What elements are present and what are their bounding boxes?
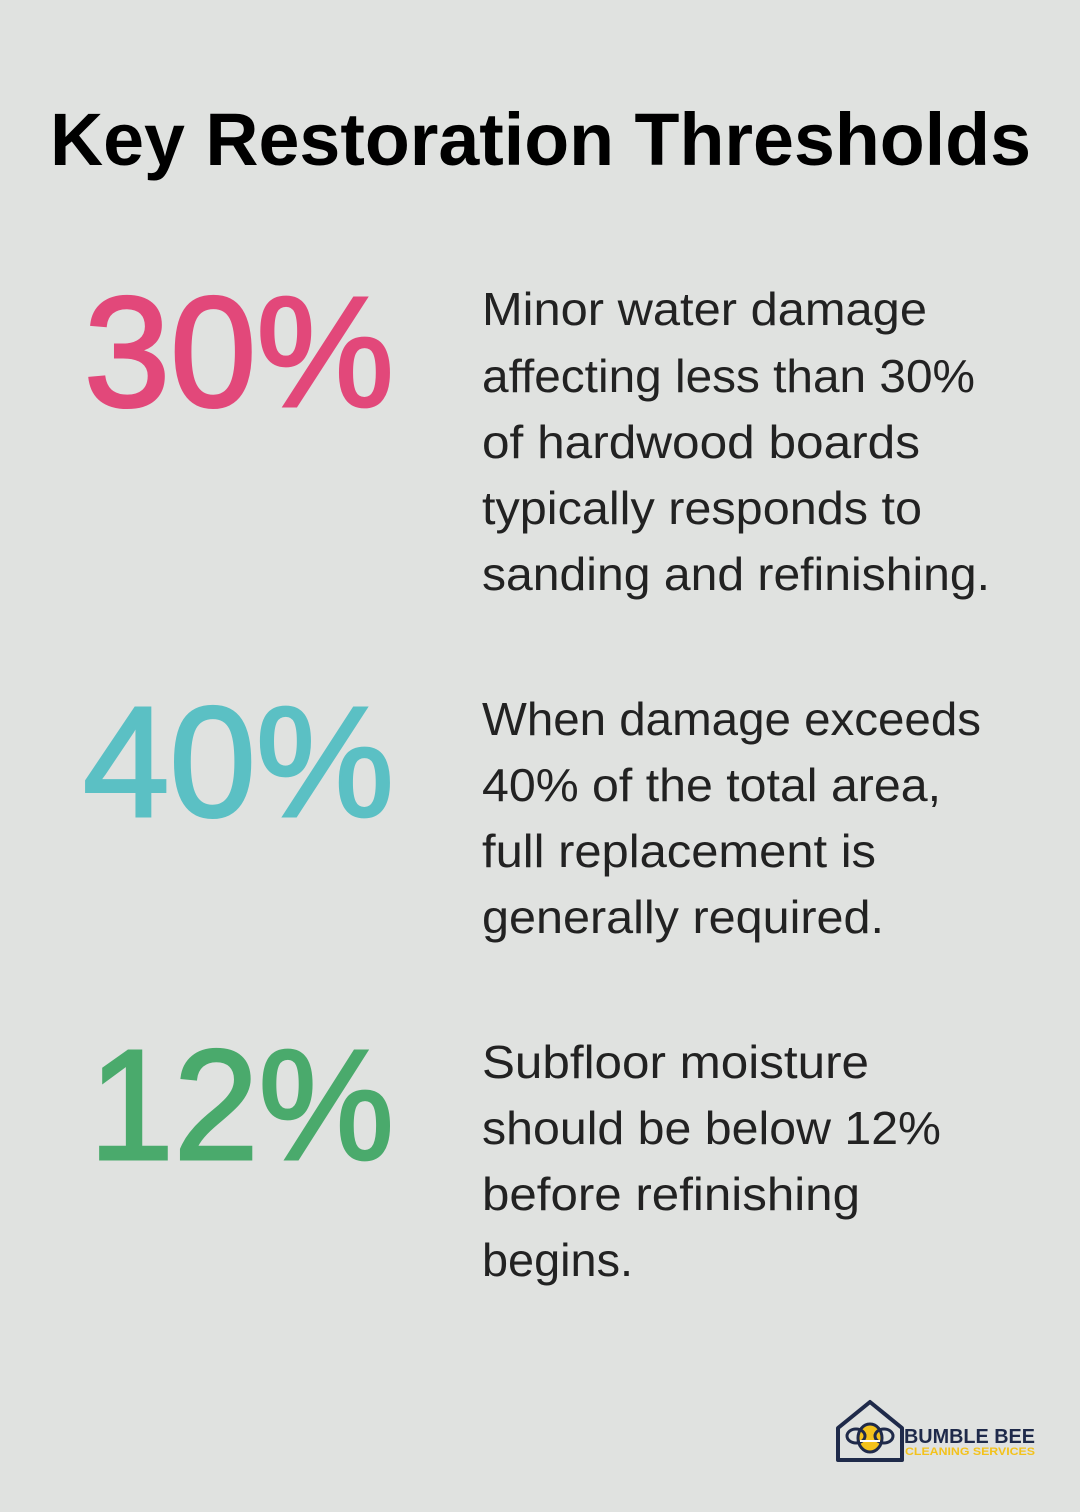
text block 3: before refinishing: [482, 1168, 860, 1220]
stat: 30%: [84, 265, 990, 600]
stat: 40%: [83, 675, 981, 943]
stat: 12%: [89, 1018, 941, 1286]
text block 3: [482, 1036, 941, 1286]
text block 3: Subfloor moisture: [482, 1036, 869, 1088]
text block 2: 40% of the total area,: [482, 759, 941, 811]
text block 1: typically responds to: [482, 482, 922, 534]
logo: [838, 1402, 1035, 1460]
logo: CLEANING SERVICES: [905, 1446, 1035, 1458]
text block 1: sanding and refinishing.: [482, 548, 990, 600]
text block 2: When damage exceeds: [482, 693, 981, 745]
number 12%: 12%: [89, 1018, 394, 1193]
text block 1: Minor water damage: [482, 283, 927, 335]
text block 1: [482, 283, 990, 600]
title: Key Restoration Thresholds: [50, 98, 1031, 181]
text block 1: of hardwood boards: [482, 416, 920, 468]
icon: house bee: [838, 1402, 902, 1460]
text block 2: [482, 693, 981, 943]
text block 3: should be below 12%: [482, 1102, 941, 1154]
text block 1: affecting less than 30%: [482, 350, 975, 402]
number 40%: 40%: [83, 675, 394, 850]
text block 2: generally required.: [482, 891, 884, 943]
number 30%: 30%: [84, 265, 394, 440]
text block 3: begins.: [482, 1234, 633, 1286]
logo text: BUMBLE BEE: [904, 1426, 1035, 1448]
text block 2: full replacement is: [482, 825, 876, 877]
